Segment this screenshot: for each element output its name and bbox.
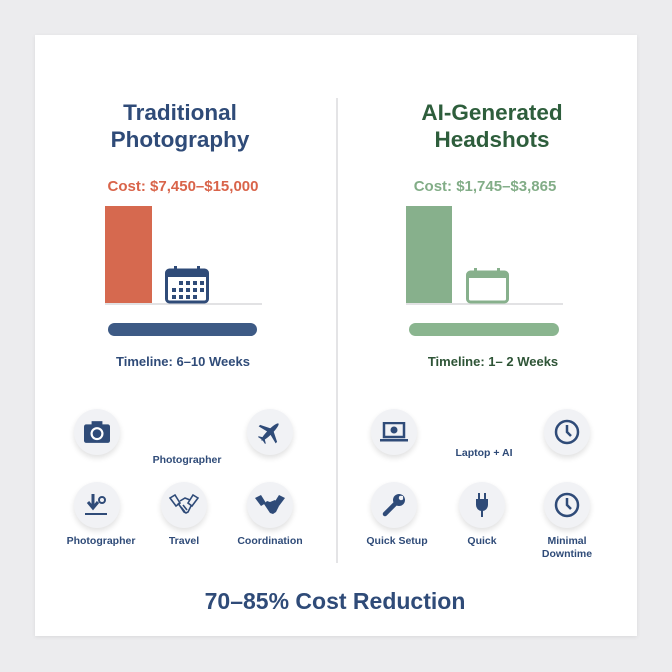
icon: handshake outline <box>161 482 207 528</box>
label: photographer: Photographer <box>153 454 221 466</box>
heading: traditional: Traditional <box>123 100 237 125</box>
label: coordination: Coordination <box>237 535 303 547</box>
bar chart: traditional <box>105 206 262 305</box>
label: minimal downtime: Downtime <box>542 548 592 560</box>
icon: laptop <box>371 409 417 455</box>
icon: clock <box>544 409 590 455</box>
label: laptop + AI: Laptop + AI <box>455 447 513 459</box>
heading: AI <box>421 100 563 152</box>
icon: calendar empty <box>466 268 509 304</box>
label: minimal downtime: Minimal <box>547 535 587 547</box>
heading: traditional: Photography <box>111 127 249 152</box>
heading: AI: AI-Generated <box>421 100 563 125</box>
cost: traditional: Cost: $7,450–$15,000 <box>108 178 258 195</box>
heading: traditional <box>111 100 250 152</box>
label: travel: Travel <box>169 535 199 547</box>
timeline bar: AI <box>409 323 559 336</box>
icon: download gear <box>74 482 120 528</box>
heading: AI: Headshots <box>434 127 550 152</box>
label: quick setup: Quick Setup <box>366 535 428 547</box>
label: quick: Quick <box>467 535 497 547</box>
bar chart: AI <box>406 206 563 305</box>
icon: calendar full <box>165 266 209 304</box>
footer headline: 70–85% Cost Reduction <box>205 588 465 614</box>
icon: plane <box>247 409 293 455</box>
timeline bar: traditional <box>108 323 257 336</box>
icon: plug <box>459 482 505 528</box>
label: photographer 2: Photographer <box>67 535 135 547</box>
timeline text: AI: Timeline: 1– 2 Weeks <box>428 354 558 369</box>
icon: wrench <box>371 482 417 528</box>
icon: handshake <box>247 482 293 528</box>
label: minimal downtime <box>542 535 592 560</box>
timeline text: traditional: Timeline: 6–10 Weeks <box>116 354 250 369</box>
icon: clock 2 <box>544 482 590 528</box>
cost: AI: Cost: $1,745–$3,865 <box>414 178 556 195</box>
icon: camera <box>74 409 120 455</box>
